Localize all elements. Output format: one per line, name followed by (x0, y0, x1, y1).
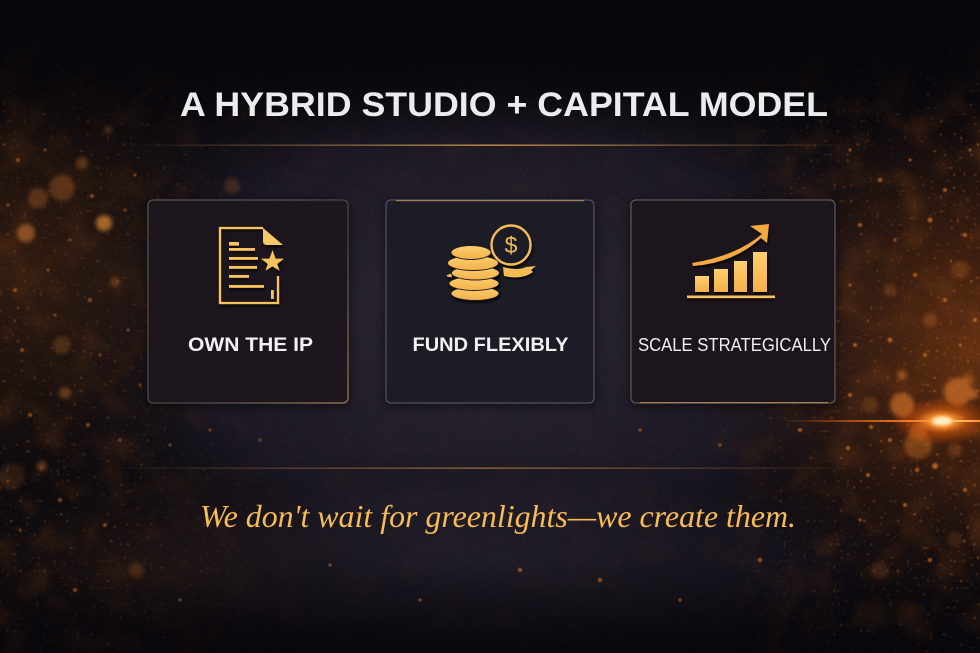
lens flare (780, 397, 980, 445)
icon: coins and dollar: $ (505, 232, 518, 258)
label: scale strategically: SCALE STRATEGICALLY (638, 335, 831, 355)
label: fund flexibly: FUND FLEXIBLY (412, 334, 568, 356)
icon: document with star (220, 228, 284, 303)
panel: own the IP (148, 200, 348, 403)
panel: fund flexibly (386, 200, 594, 403)
icon: growth chart (687, 224, 775, 298)
label: own the IP: OWN THE IP (188, 334, 313, 356)
title: A HYBRID STUDIO + CAPITAL MODEL (180, 86, 828, 124)
icon: coins and dollar (446, 226, 536, 300)
bokeh particles right (328, 148, 978, 602)
panel: scale strategically (631, 200, 835, 403)
bottom divider (105, 468, 865, 469)
bokeh particles left (0, 126, 262, 602)
top divider (130, 144, 860, 146)
tagline: We don't wait for greenlights—we create them. (200, 498, 796, 534)
